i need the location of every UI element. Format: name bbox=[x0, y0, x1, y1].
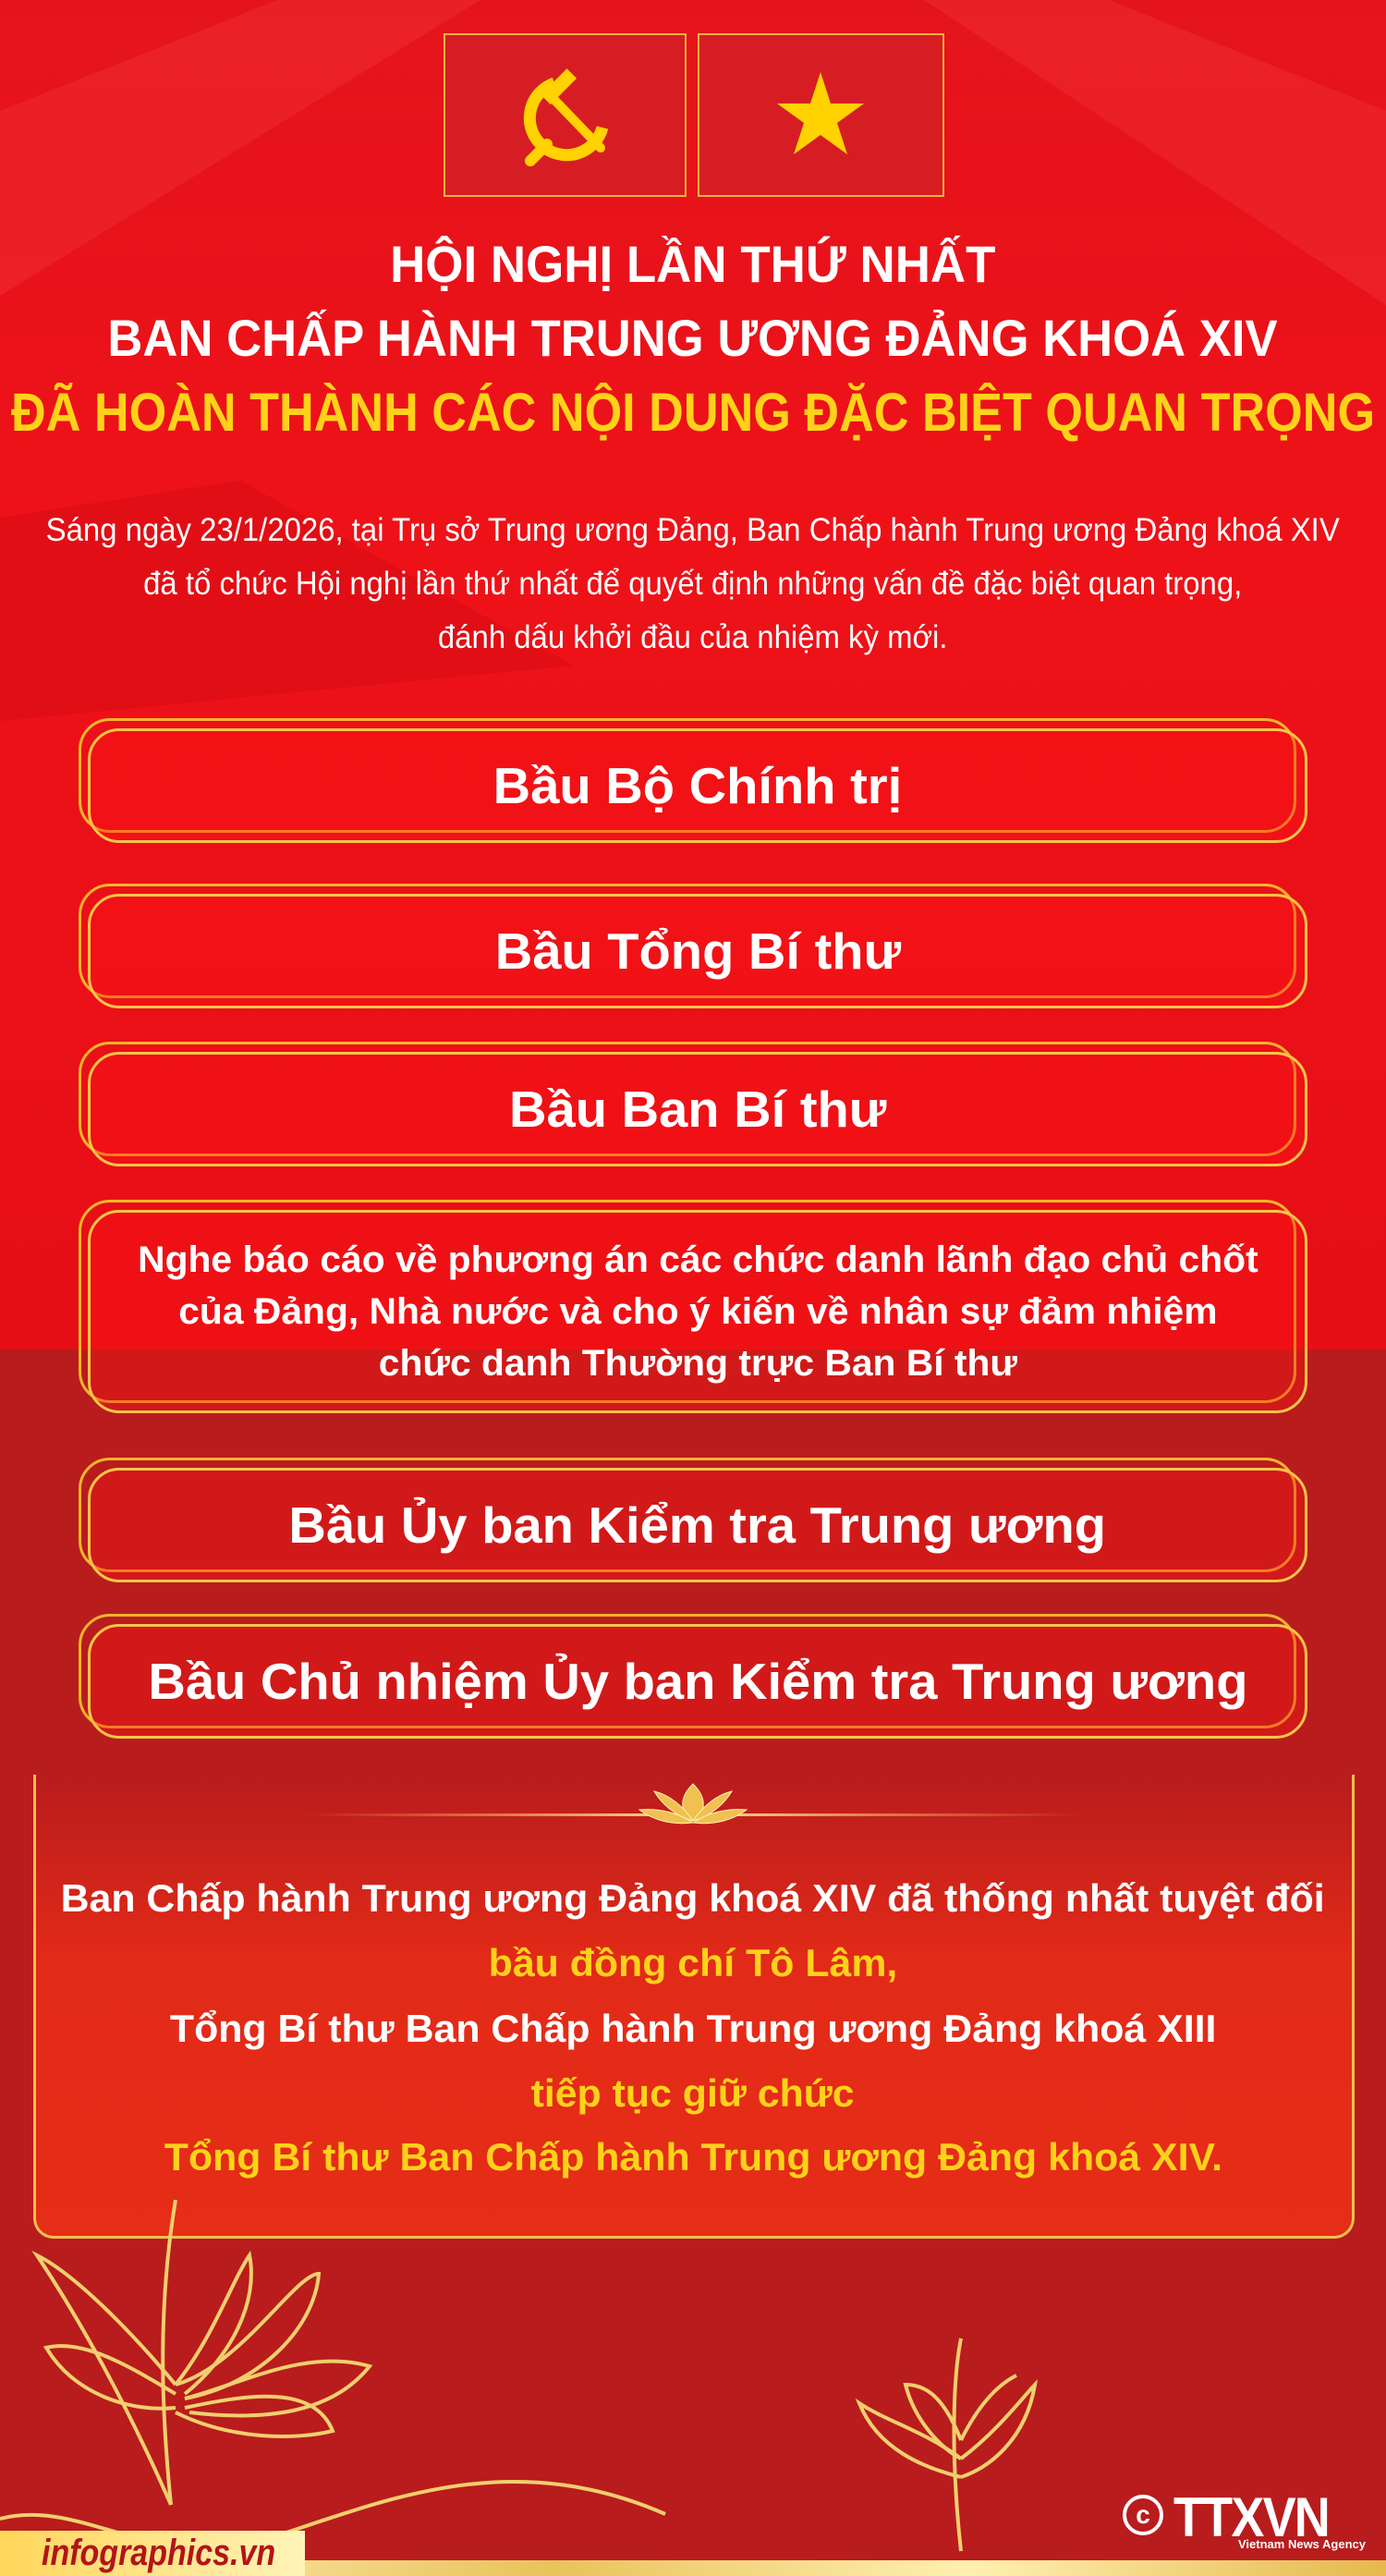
intro paragraph: Sáng ngày 23/1/2026, tại Trụ sở Trung ương Đảng, Ban Chấp hành Trung ương Đảng khoá XIV bbox=[46, 512, 1340, 548]
logo: TTXVN: TTXVN bbox=[1173, 2486, 1329, 2548]
footer: infographics.vn: infographics.vn bbox=[42, 2533, 275, 2573]
icon: lotus divider bbox=[323, 1783, 1063, 1825]
logo: TTXVN: c bbox=[1136, 2500, 1150, 2529]
icon: star bbox=[777, 72, 864, 154]
item 1 bbox=[79, 718, 1307, 843]
logo: TTXVN bbox=[1123, 2486, 1366, 2551]
title: BAN CHẤP HÀNH TRUNG ƯƠNG ĐẢNG KHOÁ XIV bbox=[108, 309, 1278, 367]
conclusion text: bầu đồng chí Tô Lâm, bbox=[489, 1941, 897, 1984]
gold bottom strip bbox=[0, 2560, 1386, 2576]
item 4: chức danh Thường trực Ban Bí thư bbox=[378, 1343, 1017, 1384]
intro paragraph: đã tổ chức Hội nghị lần thứ nhất để quyết định những vấn đề đặc biệt quan trọng, bbox=[143, 566, 1243, 602]
item 4: của Đảng, Nhà nước và cho ý kiến về nhân sự đảm nhiệm bbox=[178, 1291, 1217, 1332]
item 2 bbox=[79, 884, 1307, 1008]
decorative gold lotus flowers bbox=[0, 2200, 1038, 2551]
icon: hammer and sickle bbox=[529, 68, 602, 161]
item 3 bbox=[79, 1042, 1307, 1166]
item 6: Bầu Chủ nhiệm Ủy ban Kiểm tra Trung ương bbox=[148, 1653, 1247, 1710]
item 5: Bầu Ủy ban Kiểm tra Trung ương bbox=[289, 1496, 1106, 1554]
item 4 bbox=[79, 1200, 1307, 1413]
item 6 bbox=[79, 1614, 1307, 1739]
logo: TTXVN: Vietnam News Agency bbox=[1238, 2537, 1366, 2551]
item 5 bbox=[79, 1458, 1307, 1582]
title bbox=[11, 235, 1375, 443]
title: HỘI NGHỊ LẦN THỨ NHẤT bbox=[390, 235, 996, 293]
conclusion text: tiếp tục giữ chức bbox=[531, 2071, 855, 2115]
title: ĐÃ HOÀN THÀNH CÁC NỘI DUNG ĐẶC BIỆT QUAN TRỌNG bbox=[11, 383, 1375, 443]
conclusion text: Tổng Bí thư Ban Chấp hành Trung ương Đảng khoá XIV. bbox=[164, 2135, 1222, 2179]
item 3: Bầu Ban Bí thư bbox=[509, 1080, 886, 1138]
flag: national bbox=[698, 33, 944, 197]
conclusion text: Ban Chấp hành Trung ương Đảng khoá XIV đã thống nhất tuyệt đối bbox=[61, 1876, 1325, 1920]
conclusion panel bbox=[33, 1775, 1355, 2239]
conclusion text bbox=[61, 1876, 1325, 2179]
item 2: Bầu Tổng Bí thư bbox=[494, 922, 901, 980]
intro paragraph: đánh dấu khởi đầu của nhiệm kỳ mới. bbox=[438, 619, 948, 655]
flag: party bbox=[444, 33, 687, 197]
intro paragraph bbox=[46, 512, 1340, 655]
item 1: Bầu Bộ Chính trị bbox=[493, 757, 902, 814]
item 4: Nghe báo cáo về phương án các chức danh lãnh đạo chủ chốt bbox=[138, 1239, 1258, 1280]
decorative light diagonal shapes bbox=[0, 0, 1386, 721]
conclusion text: Tổng Bí thư Ban Chấp hành Trung ương Đảng khoá XIII bbox=[170, 2007, 1216, 2050]
footer: infographics.vn bbox=[0, 2531, 305, 2576]
